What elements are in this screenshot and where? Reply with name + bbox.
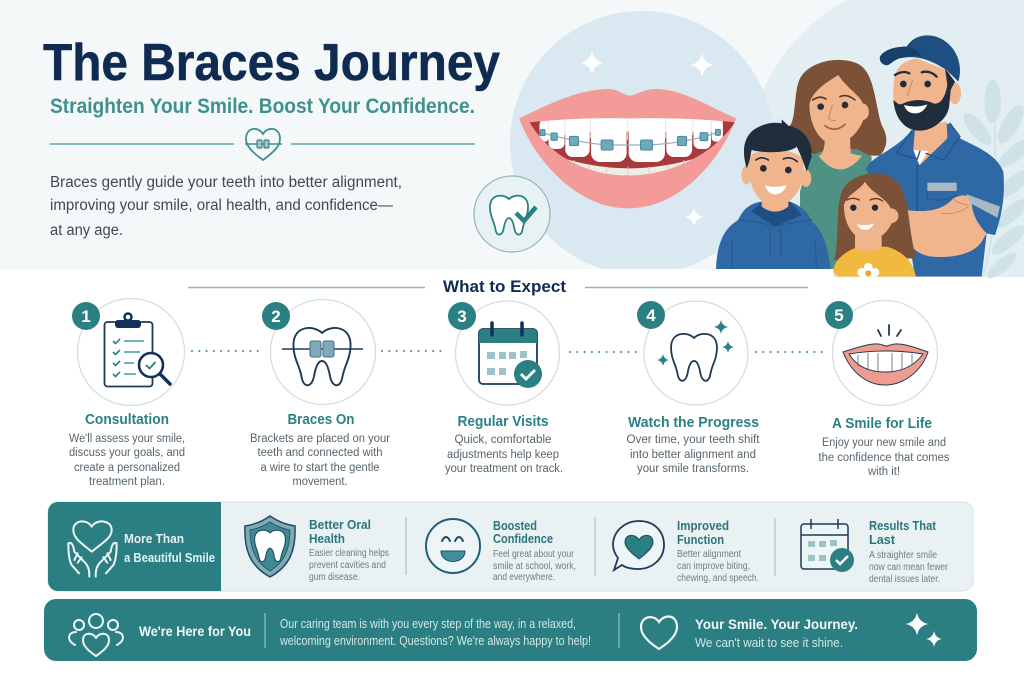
step 3: regular visits: your treatment on track. (445, 463, 563, 475)
banner: we're here for you (44, 599, 977, 661)
benefit: improved function: can improve biting, (677, 561, 750, 572)
benefit: improved function: Function (677, 533, 724, 547)
step 4: watch the progress: your smile transforms. (637, 463, 749, 475)
sparkles around smile (580, 51, 714, 226)
icon: heart in hands (68, 521, 117, 577)
heading: more than a beautiful smile: a Beautiful Smile (124, 551, 215, 565)
benefit: boosted confidence: Boosted (493, 519, 537, 533)
benefit: results that last: Results That (869, 519, 937, 533)
icon: clipboard with magnifier (104, 314, 170, 386)
step 1: consultation: 1 (81, 307, 91, 326)
icon: sparkles (906, 612, 942, 647)
benefit: boosted confidence: Feel great about your (493, 549, 575, 560)
heading: more than a beautiful smile: More Than (124, 532, 184, 546)
step 5: a smile for life: 5 (834, 306, 844, 325)
divider with heart icon (50, 129, 475, 160)
icon: tooth with check (474, 176, 550, 252)
subtitle: Straighten Your Smile. Boost Your Confidence. (50, 95, 475, 118)
man (865, 35, 1004, 277)
step 1: consultation: treatment plan. (89, 476, 165, 488)
step 2: braces on: Braces On (288, 412, 354, 428)
benefit: results that last: A straighter smile (869, 550, 937, 561)
step 1: consultation: Consultation (85, 412, 169, 428)
title: The Braces Journey (43, 34, 500, 92)
step 1: consultation (69, 298, 185, 488)
benefit: boosted confidence: smile at school, work, (493, 561, 576, 572)
step 3: regular visits: Regular Visits (458, 414, 548, 430)
step 5: a smile for life: Enjoy your new smile and (822, 437, 946, 449)
benefit: improved function: chewing, and speech. (677, 573, 759, 584)
benefit: better oral health: Easier cleaning helps (309, 548, 389, 559)
step 1: consultation: discuss your goals, and (69, 447, 185, 459)
step 1: consultation: We'll assess your smile, (69, 433, 185, 445)
icon: team with heart (69, 614, 123, 656)
benefit: results that last: dental issues later. (869, 574, 940, 585)
step 2: braces on: teeth and connected with (258, 447, 382, 459)
step 3: regular visits: adjustments help keep (447, 449, 559, 461)
heading: more than a beautiful smile (124, 532, 215, 565)
benefit: better oral health: Health (309, 532, 345, 546)
benefit: improved function: Better alignment (677, 549, 741, 560)
step 4: watch the progress: into better alignment and (630, 449, 756, 461)
benefit: better oral health: prevent cavities and (309, 560, 386, 571)
closing message: We can't wait to see it shine. (695, 635, 843, 650)
benefit: boosted confidence: and everywhere. (493, 572, 555, 583)
step 5: a smile for life (818, 300, 950, 478)
dotted connectors (192, 351, 824, 352)
step 5: a smile for life: the confidence that comes (818, 452, 950, 464)
step 3: regular visits: 3 (457, 307, 467, 326)
benefit: results that last: now can mean fewer (869, 562, 949, 573)
hero background (0, 0, 1024, 269)
hero smile circle (510, 11, 774, 275)
step 5: a smile for life: A Smile for Life (832, 416, 932, 432)
icon: tooth with bracket (282, 328, 363, 385)
intro paragraph: Braces gently guide your teeth into better alignment, (50, 174, 402, 191)
icon: sparkling tooth (657, 320, 734, 381)
panel: benefits (48, 502, 973, 591)
reassurance text: Our caring team is with you every step of the way, in a relaxed, (280, 617, 576, 631)
step 3: regular visits: Quick, comfortable (454, 434, 552, 446)
step 4: watch the progress: Watch the Progress (628, 415, 759, 431)
step 5: a smile for life: with it! (867, 466, 900, 478)
section heading: What to Expect: What to Expect (443, 278, 567, 296)
benefit: boosted confidence (426, 519, 576, 583)
intro paragraph (50, 174, 402, 239)
girl (833, 174, 916, 282)
illustration: family (716, 35, 1004, 282)
step 2: braces on: 2 (271, 307, 281, 326)
step 2: braces on: Brackets are placed on your (250, 433, 390, 445)
benefit: results that last: Last (869, 533, 896, 547)
benefit: boosted confidence: Confidence (493, 532, 553, 546)
icon: heart outline (641, 617, 677, 649)
benefit: improved function: Improved (677, 519, 729, 533)
step 4: watch the progress: 4 (646, 306, 656, 325)
reassurance text: welcoming environment. Questions? We're always happy to help! (279, 634, 591, 648)
banner: we're here for you: We're Here for You (139, 623, 251, 639)
benefit: better oral health (245, 516, 389, 583)
illustration: smile with braces (519, 89, 736, 208)
icon: smile (843, 325, 928, 385)
step 2: braces on: movement. (292, 476, 348, 488)
step 4: watch the progress: Over time, your teeth shift (626, 434, 760, 446)
closing message (695, 616, 858, 650)
closing message: Your Smile. Your Journey. (695, 616, 858, 632)
intro paragraph: improving your smile, oral health, and confidence— (50, 197, 393, 214)
step 2: braces on (250, 300, 390, 488)
icon: calendar with check (479, 323, 542, 388)
benefit: results that last (801, 519, 949, 585)
benefit: better oral health: Better Oral (309, 518, 371, 532)
reassurance text (279, 617, 591, 648)
intro paragraph: at any age. (50, 222, 123, 239)
hero right pale circle (760, 0, 1024, 277)
benefit: improved function (613, 519, 759, 584)
illustration: leaves (959, 80, 1024, 282)
boy (716, 119, 831, 270)
step 3: regular visits (445, 301, 563, 475)
step 1: consultation: create a personalized (74, 462, 180, 474)
step 2: braces on: a wire to start the gentle (260, 462, 380, 474)
step 4: watch the progress (626, 301, 760, 475)
woman (789, 60, 886, 270)
benefit: better oral health: gum disease. (309, 572, 360, 583)
